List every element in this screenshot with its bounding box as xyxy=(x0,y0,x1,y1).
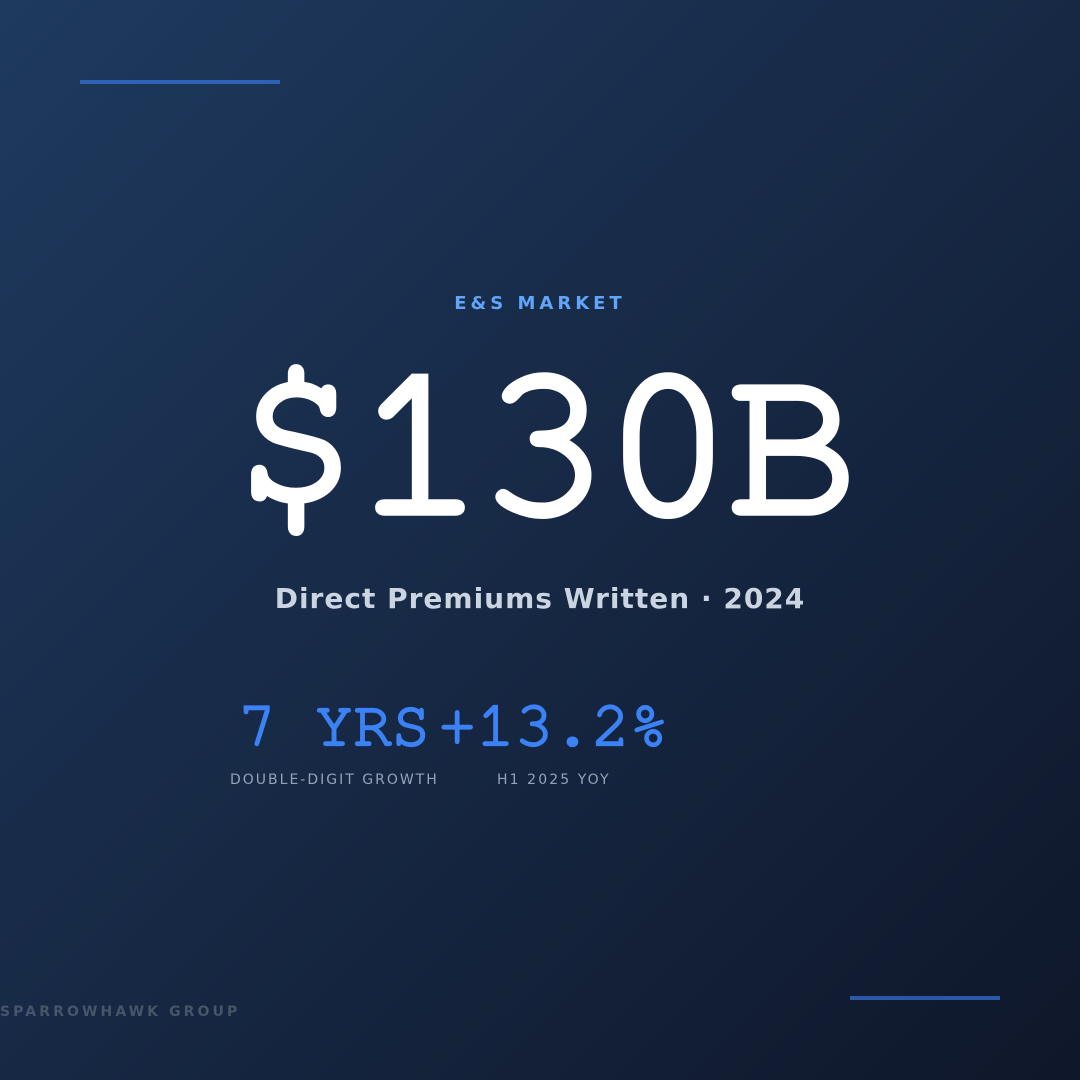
stat: growth percent: +13.2% xyxy=(438,694,668,758)
footer brand: SPARROWHAWK GROUP xyxy=(0,1004,240,1020)
bottom accent bar xyxy=(850,996,1000,1000)
main figure: $130B xyxy=(230,336,850,556)
eyebrow label: E&S MARKET xyxy=(454,293,626,314)
stat label: H1 2025 YoY: H1 2025 YOY xyxy=(497,772,611,788)
subtitle: Direct Premiums Written · 2024 xyxy=(275,582,805,615)
stat label: double-digit growth: DOUBLE-DIGIT GROWTH xyxy=(230,772,439,788)
top accent bar xyxy=(80,80,280,84)
stat: years of growth: 7 YRS xyxy=(238,694,430,758)
